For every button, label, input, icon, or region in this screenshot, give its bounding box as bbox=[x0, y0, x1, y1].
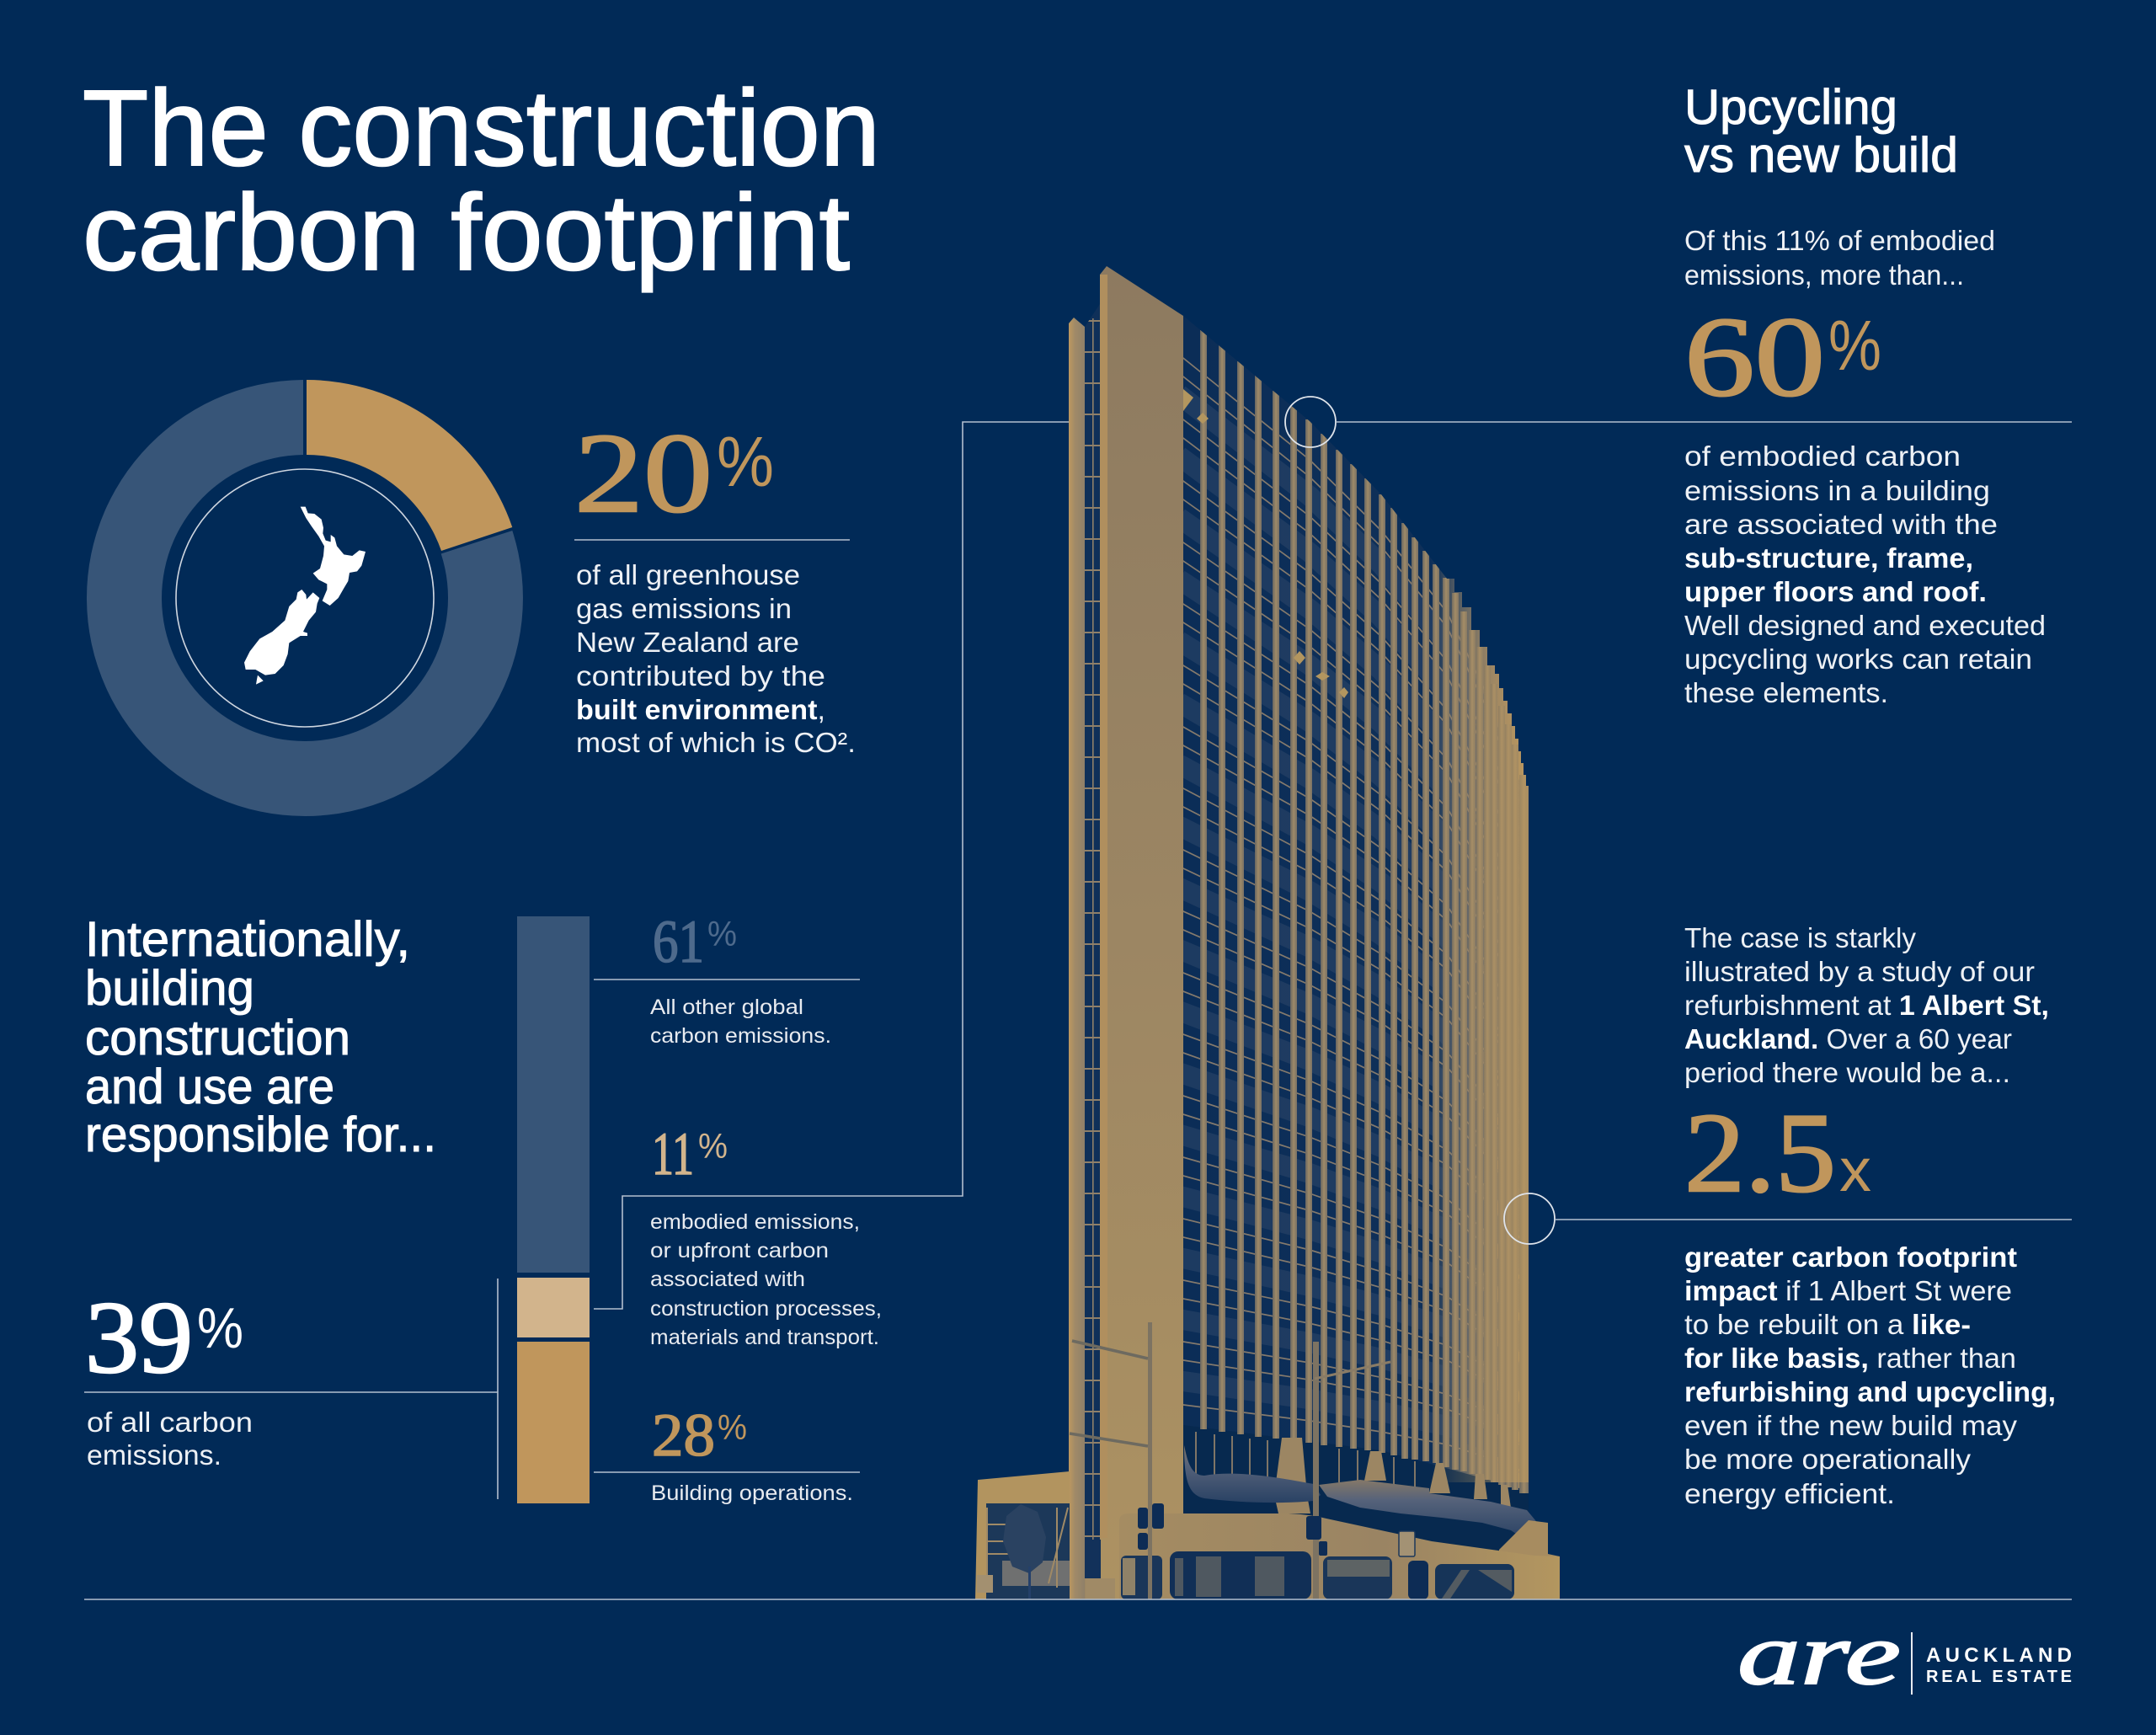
stat: 60 percent: % bbox=[1828, 306, 1881, 385]
label: 11 percent: % bbox=[698, 1126, 728, 1166]
label: 61 percent: 61 bbox=[653, 908, 704, 975]
text: embodied carbon description: upper floors and roof. bbox=[1684, 576, 1987, 607]
label: 11 percent bbox=[650, 1120, 882, 1349]
label: 61 percent: % bbox=[707, 914, 737, 953]
stat: 60 percent bbox=[1684, 295, 1881, 420]
heading: internationally: Internationally, bbox=[85, 912, 410, 967]
text: 1 Albert St case study intro: period there would be a... bbox=[1684, 1057, 2010, 1088]
logo: Auckland Real Estate bbox=[1737, 1604, 2072, 1703]
label: 11 percent: associated with bbox=[650, 1268, 805, 1291]
logo: Auckland Real Estate: REAL ESTATE bbox=[1926, 1668, 2072, 1686]
text: built environment description: New Zealand are bbox=[576, 627, 799, 658]
text: greater carbon footprint description bbox=[1684, 1241, 2056, 1509]
label: 11 percent: construction processes, bbox=[650, 1297, 882, 1321]
label: 28 percent: 28 bbox=[652, 1401, 715, 1469]
text: greater carbon footprint description: refurbishing and upcycling, bbox=[1684, 1376, 2056, 1407]
label: 11 percent: embodied emissions, bbox=[650, 1210, 860, 1234]
stat: 20 percent: 20 bbox=[574, 411, 712, 537]
text: embodied carbon description: sub-structure, frame, bbox=[1684, 542, 1973, 574]
footer rule bbox=[84, 1599, 2072, 1600]
label: 61 percent: carbon emissions. bbox=[650, 1024, 831, 1048]
heading: upcycling vs new build: vs new build bbox=[1684, 128, 1958, 183]
callout marker: lower building bbox=[1504, 1193, 2072, 1244]
text: built environment description bbox=[576, 559, 856, 758]
text: built environment description: built environment , bbox=[576, 694, 825, 725]
label: 61 percent bbox=[594, 908, 860, 1048]
text: built environment description: most of which is CO². bbox=[576, 727, 856, 758]
left annex building bbox=[975, 1471, 1115, 1599]
stacked bar chart bbox=[517, 916, 590, 1503]
text: 1 Albert St case study intro: illustrated by a study of our bbox=[1684, 956, 2035, 987]
text: intro to 60 percent: Of this 11% of embodied bbox=[1684, 225, 1995, 256]
text: built environment description: gas emissions in bbox=[576, 593, 792, 624]
text: greater carbon footprint description: even if the new build may bbox=[1684, 1410, 2018, 1441]
text: greater carbon footprint description: energy efficient. bbox=[1684, 1478, 1895, 1509]
text: 1 Albert St case study intro: Auckland. Over a 60 year bbox=[1684, 1023, 2012, 1054]
stat: 39 percent: 39 bbox=[85, 1281, 193, 1395]
logo: Auckland Real Estate: are bbox=[1737, 1604, 1901, 1703]
stat: 20 percent bbox=[574, 411, 850, 540]
text: greater carbon footprint description: impact if 1 Albert St were bbox=[1684, 1275, 2012, 1306]
text: embodied carbon description: of embodied carbon bbox=[1684, 440, 1961, 472]
text: greater carbon footprint description: be more operationally bbox=[1684, 1444, 1972, 1475]
text: built environment description: contributed by the bbox=[576, 660, 825, 691]
text: of all carbon emissions: emissions. bbox=[87, 1439, 221, 1471]
text: embodied carbon description bbox=[1684, 440, 2046, 708]
title bbox=[83, 68, 880, 293]
text: of all carbon emissions: of all carbon bbox=[87, 1407, 253, 1438]
text: intro to 60 percent bbox=[1684, 225, 1995, 291]
heading: internationally: building bbox=[85, 961, 254, 1016]
stat: 2.5x: x bbox=[1839, 1137, 1871, 1204]
concrete piers under fins bbox=[1274, 1438, 1511, 1513]
bar segment: operations 28% bbox=[517, 1342, 590, 1503]
text: greater carbon footprint description: greater carbon footprint bbox=[1684, 1241, 2017, 1273]
title: carbon footprint bbox=[83, 173, 850, 293]
stat: 20 percent: % bbox=[717, 422, 774, 501]
tower small facade details bbox=[1183, 389, 1348, 698]
heading: internationally: construction bbox=[85, 1011, 350, 1065]
heading: internationally bbox=[85, 912, 436, 1162]
callout marker: upper building bbox=[1285, 397, 2072, 447]
text: embodied carbon description: upcycling works can retain bbox=[1684, 643, 2032, 675]
bar segment: other 61% bbox=[517, 916, 590, 1273]
donut chart: New Zealand emissions share bbox=[87, 380, 523, 816]
stat: 39 percent: % bbox=[197, 1296, 243, 1360]
stat: 39 percent bbox=[85, 1281, 243, 1395]
text: embodied carbon description: emissions in a building bbox=[1684, 475, 1990, 506]
donut segment: built environment 20% bbox=[307, 380, 512, 551]
heading: upcycling vs new build bbox=[1684, 80, 1958, 183]
text: embodied carbon description: Well designed and executed bbox=[1684, 610, 2046, 641]
text: greater carbon footprint description: for like basis, rather than bbox=[1684, 1343, 2016, 1374]
label: 11 percent: or upfront carbon bbox=[650, 1239, 829, 1263]
connector: embodied emissions to building bbox=[594, 422, 1069, 1309]
text: 1 Albert St case study intro: refurbishment at 1 Albert St, bbox=[1684, 990, 2049, 1021]
bar segment: embodied 11% bbox=[517, 1278, 590, 1337]
label: 11 percent: 11 bbox=[652, 1120, 694, 1188]
waka sculpture canopies bbox=[1184, 1445, 1544, 1539]
stat: 60 percent: 60 bbox=[1684, 295, 1825, 420]
label: 11 percent: materials and transport. bbox=[650, 1326, 879, 1349]
heading: internationally: responsible for... bbox=[85, 1108, 436, 1162]
tower curtain wall with fins bbox=[1179, 312, 1529, 1567]
icon: map of New Zealand bbox=[244, 507, 366, 685]
text: 1 Albert St case study intro bbox=[1684, 922, 2049, 1088]
text: built environment description: of all greenhouse bbox=[576, 559, 800, 590]
label: 61 percent: All other global bbox=[650, 996, 803, 1019]
bracket connector for 39 percent bbox=[84, 1279, 498, 1499]
title: The construction bbox=[83, 68, 880, 189]
text: embodied carbon description: are associated with the bbox=[1684, 509, 1998, 540]
text: of all carbon emissions bbox=[87, 1407, 253, 1471]
street lights and traffic signals bbox=[1070, 1322, 1390, 1599]
logo: Auckland Real Estate: AUCKLAND bbox=[1926, 1644, 2072, 1667]
text: intro to 60 percent: emissions, more than... bbox=[1684, 259, 1964, 291]
label: 28 percent: % bbox=[718, 1407, 747, 1447]
photo illustration: 1 Albert St tower bbox=[975, 266, 1560, 1599]
tower left pier and blank wall bbox=[1069, 266, 1183, 1599]
donut segment: remaining 80% bbox=[87, 380, 523, 816]
text: embodied carbon description: these elements. bbox=[1684, 677, 1888, 708]
label: 28 percent bbox=[594, 1401, 860, 1505]
label: 28 percent: Building operations. bbox=[651, 1481, 853, 1505]
stat: 2.5x: 2.5 bbox=[1684, 1091, 1836, 1216]
inner ring bbox=[176, 469, 434, 727]
text: greater carbon footprint description: to be rebuilt on a like- bbox=[1684, 1309, 1971, 1340]
text: 1 Albert St case study intro: The case is starkly bbox=[1684, 922, 1917, 953]
podium with shopfront windows bbox=[1119, 1513, 1560, 1599]
heading: internationally: and use are bbox=[85, 1060, 334, 1114]
heading: upcycling vs new build: Upcycling bbox=[1684, 80, 1897, 135]
